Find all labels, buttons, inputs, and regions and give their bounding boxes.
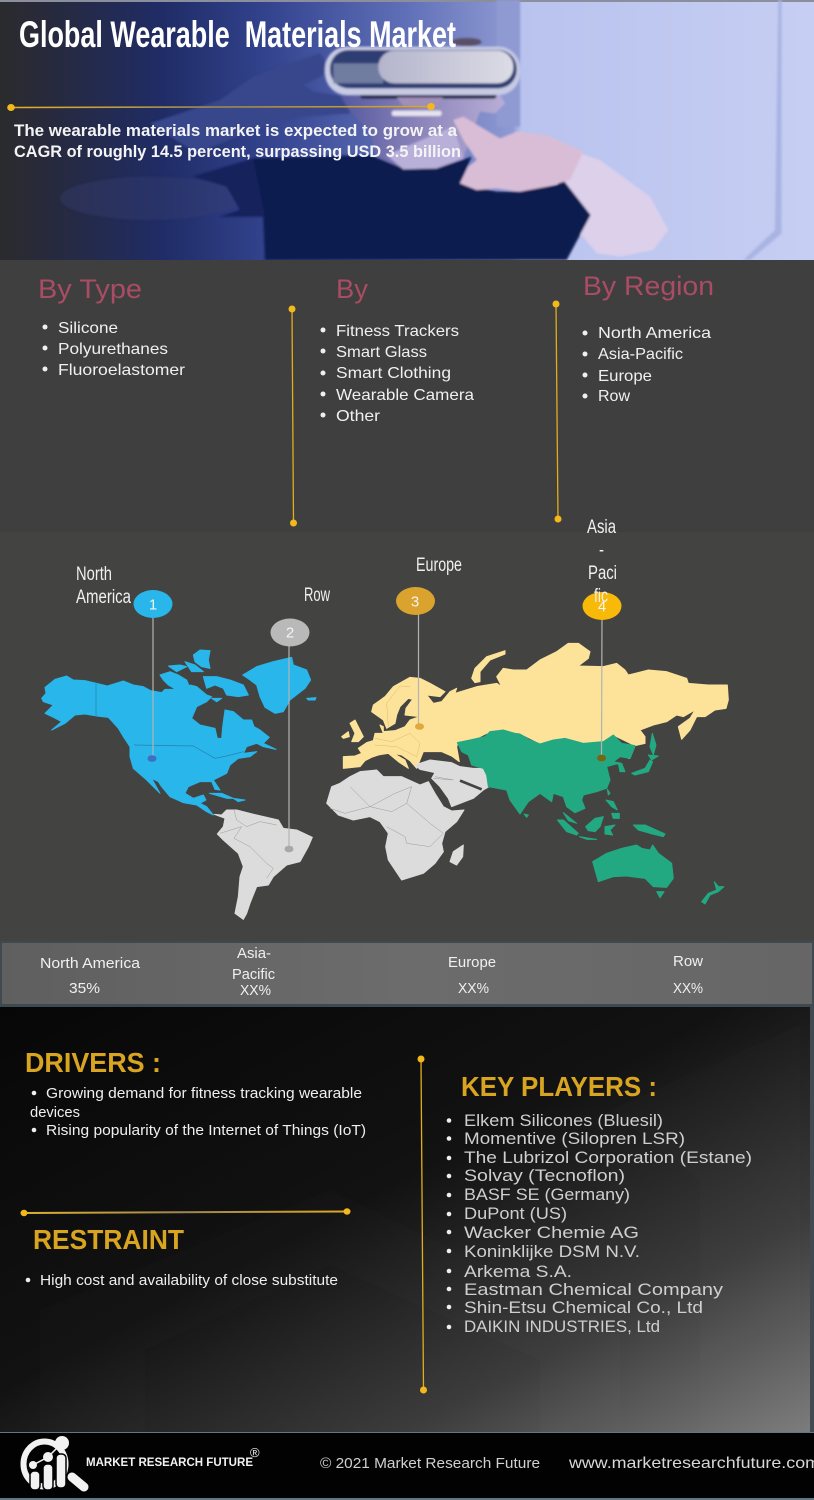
region: South America [214,810,312,919]
text block: key players: Shin-Etsu Chemical Co., Ltd [464,1298,703,1317]
map: Europe Asia Africa Oceania [327,643,728,904]
label: North America: America [76,587,131,608]
marker: pin 4 Asia-Pacific: 4 [598,598,606,616]
stat: Row [673,953,703,997]
divider: center vertical line [418,1056,427,1394]
text block: drivers: Growing demand for fitness tracking wearable [46,1085,362,1102]
panel: regional share strip [0,941,814,1008]
text block: hero summary: The wearable materials market is expected to grow at a [14,122,458,140]
label: Asia-Pacific: - [599,540,604,561]
marker: pin 4 Asia-Pacific [582,592,622,761]
panel: segmentation [0,260,814,532]
text block: key players [447,1071,752,1336]
text block: hero summary: CAGR of roughly 14.5 percent, surpassing USD 3.5 billion [14,143,461,161]
panel: drivers restraint and key players [0,1007,814,1432]
marker: pin 3 Europe [396,587,435,730]
column: by type: By Type [38,274,142,304]
marker: pin 3 Europe: 3 [411,594,419,610]
column: by region [582,271,714,405]
stat: Europe: XX% [458,980,489,997]
text block: hero summary [14,122,461,161]
text: registered mark: ® [250,1445,260,1460]
stat: Asia-Pacific [232,945,275,999]
map: Americas [42,650,316,919]
label: Asia-Pacific [587,517,617,607]
label: North America: North [76,564,112,585]
text block: key players: The Lubrizol Corporation (Estane) [464,1148,752,1167]
stat: Row: Row [673,953,703,970]
text block: drivers: Rising popularity of the Internet of Things (IoT) [46,1122,366,1139]
panel: footer [0,1432,814,1500]
text block: restraint: High cost and availability of close substitute [40,1272,338,1289]
label: Europe: Europe [416,555,462,576]
marker: pin 1 North America [134,590,172,762]
region: North America [42,650,316,815]
text block: key players: KEY PLAYERS : [461,1071,657,1102]
divider: vertical line two [552,300,562,522]
column: by region: Asia-Pacific [598,346,683,363]
marker: pin 1 North America: 1 [149,596,157,614]
column: by application: Other [336,408,381,425]
stat: Europe [448,954,496,997]
title: Global Wearable Materials Market [19,14,456,55]
divider: hero line [7,103,435,111]
divider: restraint line [20,1208,350,1216]
divider: vertical line one [288,306,297,526]
column: by region: Row [598,388,630,405]
column: by region: North America [598,325,711,342]
text block: key players: BASF SE (Germany) [464,1185,630,1204]
text: brand name: MARKET RESEARCH FUTURE [86,1457,253,1469]
text block: key players: Koninklijke DSM N.V. [464,1242,640,1261]
label: Asia-Pacific: Paci [588,563,617,584]
column: by region: By Region [583,271,714,301]
text block: key players: Elkem Silicones (Bluesil) [464,1111,663,1130]
column: by type: Fluoroelastomer [58,362,186,379]
marker: pin 2 Row [270,618,310,852]
stat: Asia-Pacific: XX% [240,982,271,999]
column: by type: Silicone [58,320,118,337]
text: website: www.marketresearchfuture.com [568,1455,814,1472]
column: by application [320,274,474,425]
stat: North America: North America [40,955,141,972]
column: by region: Europe [598,368,652,385]
panel: hero banner [0,0,814,260]
stat: Asia-Pacific: Pacific [232,966,275,983]
text block: key players: Arkema S.A. [464,1262,572,1281]
text block: drivers: devices [30,1104,80,1121]
text block: restraint [26,1224,338,1289]
label: Row: Row [304,585,330,606]
column: by type: Polyurethanes [58,341,168,358]
label: Asia-Pacific: Asia [587,517,616,538]
stat: North America: 35% [69,980,100,997]
text block: restraint: RESTRAINT [33,1224,184,1255]
text: copyright: © 2021 Market Research Future [320,1455,540,1472]
column: by application: Wearable Camera [336,387,474,404]
stat: Europe: Europe [448,954,496,971]
text block: key players: Solvay (Tecnoflon) [464,1166,625,1185]
stat: North America [40,955,141,997]
column: by type [38,274,186,379]
marker: pin 2 Row: 2 [286,624,294,642]
region: Africa and Middle East [327,760,489,880]
text block: key players: Wacker Chemie AG [464,1223,639,1242]
label: Asia-Pacific: fic [594,586,608,607]
column: by application: Smart Clothing [336,365,451,382]
text block: key players: DuPont (US) [464,1204,567,1223]
icon: market research future logo [24,1436,84,1490]
panel: regional map [0,517,814,942]
text block: key players: Momentive (Silopren LSR) [464,1129,685,1148]
stat: Asia-Pacific: Asia- [237,945,271,962]
label: North America [76,564,131,608]
column: by application: Fitness Trackers [336,323,459,340]
text block: key players: DAIKIN INDUSTRIES, Ltd [464,1317,660,1336]
stat: Row: XX% [673,980,703,997]
region: Europe and Russia [342,643,728,768]
column: by application: By [336,274,369,304]
illustration: person wearing VR headset [60,0,782,260]
text block: drivers: DRIVERS : [25,1047,161,1078]
text block: drivers [25,1047,366,1139]
text block: key players: Eastman Chemical Company [464,1280,724,1299]
column: by application: Smart Glass [336,344,427,361]
region: Asia-Pacific [457,730,724,904]
